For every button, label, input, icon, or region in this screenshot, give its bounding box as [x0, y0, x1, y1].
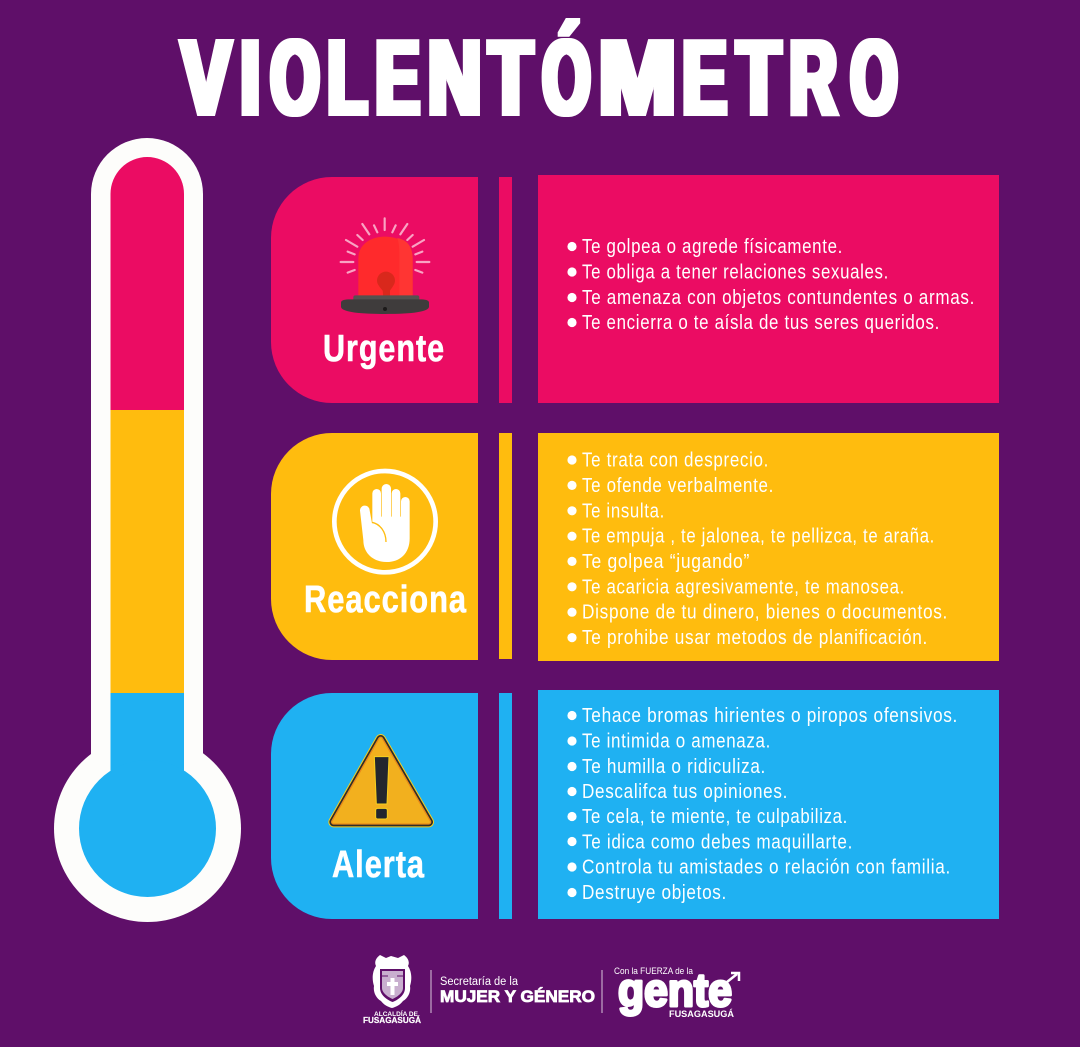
text: alcaldía de fusagasugá: FUSAGASUGÁ [363, 1016, 421, 1025]
thermometer level: reacciona [110, 410, 184, 693]
title: R [790, 19, 837, 137]
title: O [271, 19, 319, 137]
list: urgente: Te obliga a tener relaciones sexuales. [582, 261, 889, 283]
list: alerta: Destruye objetos. [582, 882, 727, 904]
footer logos [363, 955, 739, 1025]
list: reacciona: Te acaricia agresivamente, te manosea. [582, 576, 905, 598]
thermometer level: urgente [110, 157, 184, 410]
thermometer [54, 138, 241, 922]
icon: alarm siren [341, 218, 429, 314]
label: reacciona: Reacciona [304, 579, 467, 621]
list: reacciona: Te insulta. [582, 500, 665, 522]
title: T [737, 19, 780, 137]
thermometer level: alerta [79, 693, 216, 897]
list: urgente: Te encierra o te aísla de tus seres queridos. [582, 312, 940, 334]
text: secretaría de la mujer y género: Secretaría de la [440, 976, 519, 988]
logo: con la fuerza de la gente: Con la FUERZA de la [614, 966, 694, 977]
title: N [428, 19, 481, 137]
list: alerta: Descalifca tus opiniones. [582, 781, 788, 803]
title: O [851, 19, 897, 137]
list: reacciona: Dispone de tu dinero, bienes o documentos. [582, 602, 948, 624]
title: V [182, 19, 231, 137]
list: urgente: Te golpea o agrede físicamente. [582, 236, 843, 258]
list: alerta: Te cela, te miente, te culpabiliza. [582, 806, 848, 828]
panel: urgente [271, 175, 999, 403]
icon: warning triangle [334, 739, 429, 822]
list: reacciona: Te golpea “jugando” [582, 551, 750, 573]
title: L [328, 19, 367, 137]
list: reacciona [567, 450, 948, 649]
list: reacciona: Te empuja , te jalonea, te pellizca, te araña. [582, 526, 935, 548]
text: secretaría de la mujer y género [440, 976, 595, 1006]
title [182, 19, 897, 137]
text: alcaldía de fusagasugá [363, 1010, 421, 1025]
list: reacciona: Te prohibe usar metodos de planificación. [582, 627, 928, 649]
list: reacciona: Te ofende verbalmente. [582, 475, 774, 497]
list: alerta: Tehace bromas hirientes o piropos ofensivos. [582, 705, 958, 727]
text: secretaría de la mujer y género: MUJER Y GÉNERO [440, 987, 595, 1006]
logo: con la fuerza de la gente: FUSAGASUGÁ [669, 1009, 734, 1020]
list: alerta: Te humilla o ridiculiza. [582, 756, 766, 778]
list: reacciona: Te trata con desprecio. [582, 450, 769, 472]
panel: alerta [271, 690, 999, 919]
title: Ó [543, 19, 590, 137]
icon: stop hand [334, 471, 436, 572]
title: M [599, 19, 676, 137]
logo: alcaldía crest [373, 955, 411, 1008]
list: urgente: Te amenaza con objetos contundentes o armas. [582, 287, 975, 309]
list: alerta [567, 705, 958, 904]
title: E [683, 19, 726, 137]
list: urgente [567, 236, 975, 334]
panel: reacciona [271, 433, 999, 661]
list: alerta: Controla tu amistades o relación con familia. [582, 857, 951, 879]
title: T [489, 19, 532, 137]
label: alerta: Alerta [332, 844, 425, 886]
logo: con la fuerza de la gente: gente [618, 964, 732, 1016]
title: I [241, 19, 260, 137]
label: urgente: Urgente [323, 328, 445, 370]
list: alerta: Te idica como debes maquillarte. [582, 831, 853, 853]
list: alerta: Te intimida o amenaza. [582, 730, 771, 752]
title: E [376, 19, 419, 137]
text: alcaldía de fusagasugá: ALCALDÍA DE [374, 1010, 418, 1018]
